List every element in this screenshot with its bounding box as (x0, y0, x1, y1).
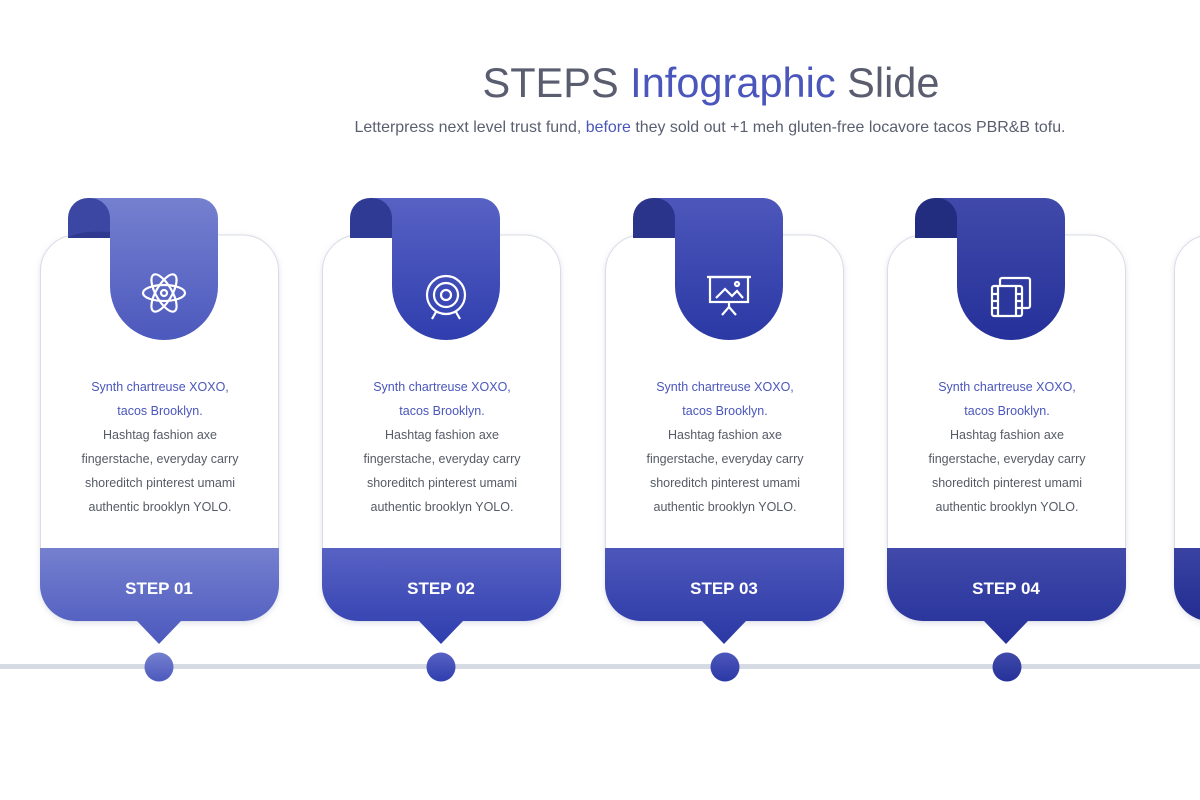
icon: film frames (992, 278, 1030, 316)
icon: presentation board (707, 277, 751, 315)
text block (81, 380, 239, 514)
card: step 03 (605, 198, 844, 682)
card: step 02: shoreditch pinterest umami (367, 476, 517, 490)
card: step 01 (40, 198, 279, 682)
text block: Synth chartreuse XOXO, (91, 380, 229, 394)
subtitle: Letterpress next level trust fund, before they sold out +1 meh gluten-free locavore tacos PBR&B tofu. (354, 119, 1066, 136)
card: step 04: shoreditch pinterest umami (932, 476, 1082, 490)
card: step 04: tacos Brooklyn. (964, 404, 1050, 418)
card: step 02 (322, 198, 561, 682)
text block: fingerstache, everyday carry (81, 452, 239, 466)
icon: target (427, 276, 465, 319)
card: step 03: shoreditch pinterest umami (650, 476, 800, 490)
card: step 03: authentic brooklyn YOLO. (654, 500, 796, 514)
card: step 04: Hashtag fashion axe (950, 428, 1064, 442)
step label band (40, 548, 279, 644)
text block: authentic brooklyn YOLO. (89, 500, 231, 514)
ribbon icon holder (90, 198, 218, 340)
card: step 03: Synth chartreuse XOXO, (656, 380, 794, 394)
text block: tacos Brooklyn. (117, 404, 203, 418)
card: step 03: Hashtag fashion axe (668, 428, 782, 442)
card: step 03: tacos Brooklyn. (682, 404, 768, 418)
icon: atom (143, 271, 185, 315)
card: step 03: fingerstache, everyday carry (646, 452, 804, 466)
dot (144, 652, 174, 682)
text block: shoreditch pinterest umami (85, 476, 235, 490)
card: step 02: fingerstache, everyday carry (363, 452, 521, 466)
card: step 01: STEP 01 (125, 579, 193, 598)
card: step 02: STEP 02 (407, 579, 475, 598)
card: step 02: authentic brooklyn YOLO. (371, 500, 513, 514)
card: step 02: Synth chartreuse XOXO, (373, 380, 511, 394)
card: step 04: fingerstache, everyday carry (928, 452, 1086, 466)
card: step 03: STEP 03 (690, 579, 758, 598)
title: STEPS Infographic Slide (482, 59, 940, 106)
card: step 04: authentic brooklyn YOLO. (936, 500, 1078, 514)
text block: Hashtag fashion axe (103, 428, 217, 442)
card: step 04: STEP 04 (972, 579, 1040, 598)
card: step 04: Synth chartreuse XOXO, (938, 380, 1076, 394)
card: step 02: tacos Brooklyn. (399, 404, 485, 418)
card: step 02: Hashtag fashion axe (385, 428, 499, 442)
card: step 04 (887, 198, 1126, 682)
timeline line (0, 664, 1200, 669)
card: step 05 (partial) (1174, 235, 1200, 621)
